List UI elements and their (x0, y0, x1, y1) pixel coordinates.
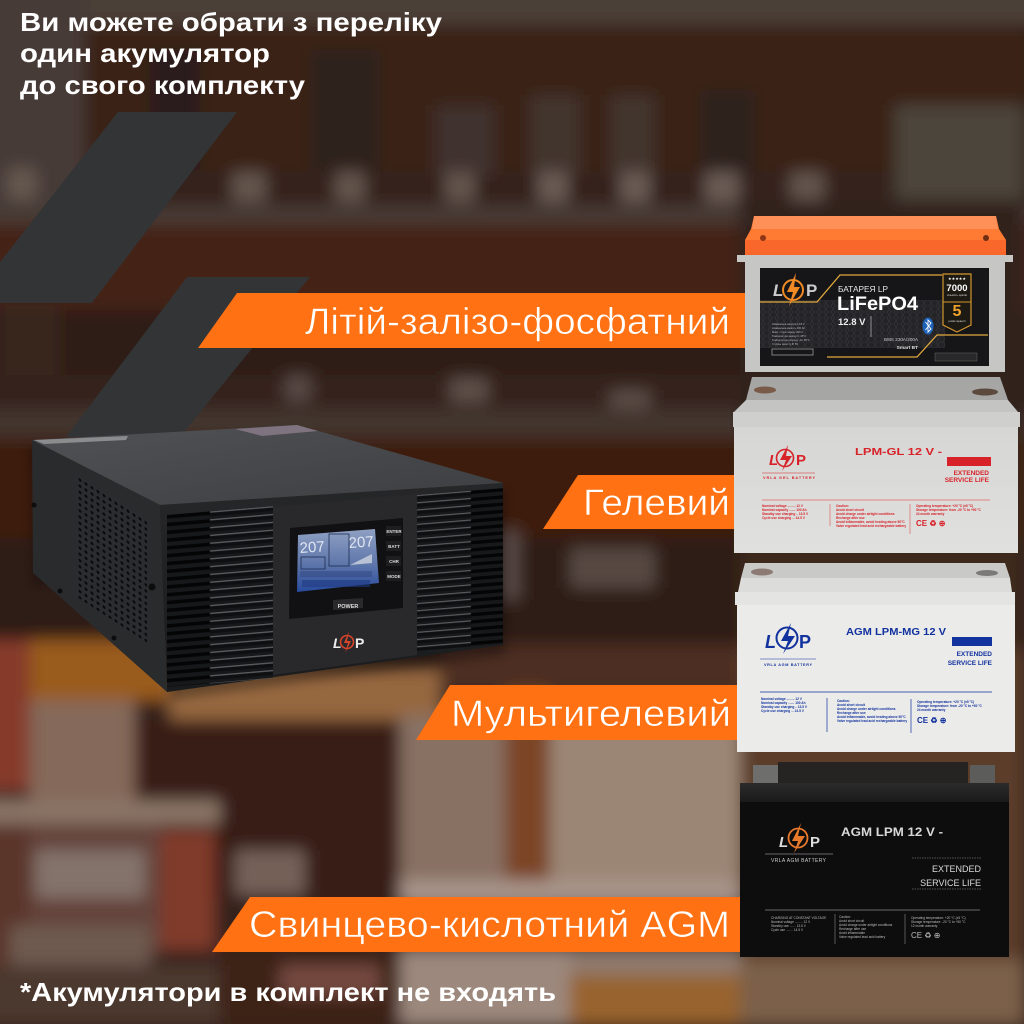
multigel logo (760, 623, 816, 667)
battery grey case (737, 255, 1013, 372)
multigel specs: Cycle use charging ... 14.5 V (761, 709, 805, 713)
multigel specs: Nominal capacity ....... 100 Ah (761, 701, 806, 705)
multigel model text: AGM LPM-MG 12 V (846, 626, 946, 638)
battery: AGM black (740, 762, 1009, 957)
label band: gel (543, 475, 736, 529)
spec lines: Номінальна ємність 230 Ah (772, 326, 805, 330)
inverter lcd screen (297, 529, 379, 592)
battery: LiFePO4: Smart BT (897, 345, 918, 351)
inverter front face (160, 483, 503, 692)
multigel specs: Standby use charging .. 13.5 V (761, 705, 808, 709)
multigel logo: P (799, 632, 811, 652)
multigel specs: Nominal voltage ......... 12 V (761, 697, 803, 701)
warranty badge: 7000 (946, 283, 968, 294)
battery: LiFePO4: 12.8 V (838, 317, 866, 328)
multigel specs: Caution: (837, 699, 850, 703)
multigel logo: VRLA AGM BATTERY (764, 663, 812, 667)
inverter top face (32, 425, 503, 505)
label logo: P (806, 281, 817, 300)
multigel specs: Avoid short circuit (837, 703, 866, 707)
label band: lithium iron phosphate: Літій-залізо-фосфатний (305, 301, 730, 342)
multigel specs (760, 692, 992, 733)
heading text (20, 7, 443, 100)
gel specs (762, 500, 990, 534)
AGM logo: VRLA AGM BATTERY (771, 858, 827, 864)
gel specs: Standby use charging .. 13.5 V (762, 512, 809, 516)
label band: lithium iron phosphate (198, 293, 748, 348)
AGM specs: Avoid inflammable (839, 931, 865, 935)
AGM specs: Standby use ....... 13.5 V (771, 924, 807, 928)
gel specs: Recharge after use (836, 516, 865, 520)
inverter lcd screen: 207 (299, 538, 325, 557)
AGM specs: Avoid charge under airtight conditions (839, 923, 893, 927)
AGM specs: Storage temperature: -20 °C to +50 °C (911, 920, 966, 924)
gel specs: Avoid short circuit (836, 508, 865, 512)
multigel specs: Valve regulated lead acid rechargeable battery (837, 719, 907, 723)
gel specs: Avoid inflammable, avoid heating above 50°C (836, 520, 905, 524)
AGM specs: 12 month warranty (911, 924, 938, 928)
spec lines (772, 322, 810, 346)
inverter buttons (386, 526, 402, 581)
AGM logo: P (810, 834, 820, 851)
spec lines: Макс. струм заряду 200 A (772, 330, 803, 334)
multigel specs: Avoid inflammable, avoid heating above 50°C (837, 715, 906, 719)
warranty badge: 5 (953, 303, 962, 320)
AGM model text: EXTENDED (932, 864, 981, 874)
inverter device (30, 425, 505, 700)
AGM specs: Operating temperature: +20 °C (±5 °C) (911, 916, 966, 920)
label logo (773, 273, 817, 306)
gel specs: Nominal voltage ......... 12 V (762, 504, 804, 508)
battery: LiFePO4 (737, 216, 1013, 372)
gel specs: Storage temperature: from -20 °C to +50 °C (916, 508, 982, 512)
heading text: Ви можете обрати з переліку (20, 7, 443, 37)
battery: multigel (735, 563, 1015, 752)
multigel model text (846, 626, 993, 667)
label band: multigel (416, 685, 738, 740)
battery: gel (733, 377, 1020, 553)
label band: lead acid AGM (212, 897, 742, 952)
multigel specs: CE ♻ ⊕ (917, 716, 947, 725)
inverter buttons: BATT (388, 544, 400, 549)
inverter vents (167, 488, 503, 687)
gel model text: EXTENDED (954, 470, 989, 477)
gel logo (762, 445, 815, 480)
AGM specs: Valve regulated lead acid battery (839, 935, 886, 939)
AGM specs: Recharge after use (839, 927, 866, 931)
AGM specs: CHARGING AT CONSTANT VOLTAGE (771, 916, 826, 920)
inverter centre panel (273, 494, 417, 675)
inverter LOP logo (333, 631, 364, 653)
spec lines: Температура заряду 0..45°C (772, 334, 806, 338)
label band: lead acid AGM: Свинцево-кислотний AGM (249, 904, 730, 945)
gel model text (855, 446, 991, 484)
AGM specs: Caution: (839, 915, 851, 919)
warranty badge: кількість циклів (947, 293, 967, 297)
multigel logo: L (765, 632, 776, 652)
warranty badge: років гарантії (948, 319, 966, 323)
AGM specs: CE ♻ ⊕ (911, 931, 940, 940)
multigel specs: Storage temperature: from -20 °C to +50 °C (917, 704, 983, 708)
gel logo: L (769, 452, 778, 469)
warranty badge: ★★★★★ (948, 276, 966, 281)
battery: LiFePO4: LiFePO4 (837, 294, 918, 315)
gel specs: Avoid charge under airtight conditions (836, 512, 895, 516)
battery lid orange (745, 216, 1006, 255)
multigel specs: 24 month warranty (917, 708, 946, 712)
heading text: один акумулятор (20, 38, 270, 68)
label title: БАТАРЕЯ LP (838, 284, 888, 294)
spec lines: Ступінь захисту IP 65 (772, 342, 798, 346)
inverter power button (333, 598, 363, 610)
AGM model text: AGM LPM 12 V - (841, 825, 943, 839)
label band: multigel: Мультигелевий (451, 693, 731, 734)
battery black label (760, 268, 989, 366)
gel specs: Valve regulated lead acid rechargeable battery (836, 524, 906, 528)
multigel specs: Avoid charge under airtight conditions (837, 707, 896, 711)
inverter lcd screen: 207 (348, 533, 374, 552)
spec lines: Номінальна напруга 12.8 V (772, 322, 805, 326)
gel specs: Cycle use charging ... 14.5 V (762, 516, 806, 520)
AGM specs: Nominal voltage ......... 12 V (771, 920, 811, 924)
label logo: L (773, 281, 783, 300)
AGM specs: Avoid short circuit (839, 919, 864, 923)
multigel model text: EXTENDED (957, 651, 992, 658)
spec lines: Температура розряду -20..60°C (772, 338, 810, 342)
gel model text: LPM-GL 12 V - (855, 446, 943, 458)
inverter left side (32, 440, 167, 692)
decorative dark parallelogram upper (0, 112, 237, 303)
AGM logo (765, 823, 833, 864)
heading text: до свого комплекту (20, 70, 306, 100)
label band: gel: Гелевий (583, 482, 730, 523)
inverter LOP logo: L (333, 635, 342, 651)
warranty badge (943, 274, 971, 332)
inverter display bezel (289, 518, 403, 619)
inverter power button: POWER (338, 604, 358, 610)
decorative dark parallelogram lower (66, 277, 310, 437)
AGM specs (765, 910, 980, 944)
gel model text: SERVICE LIFE (945, 477, 990, 484)
bluetooth icon (922, 318, 934, 334)
AGM logo: L (779, 834, 788, 851)
gel specs: Nominal capacity ....... 100 Ah (762, 508, 807, 512)
gel specs: CE ♻ ⊕ (916, 519, 946, 528)
footnote: *Акумулятори в комплект не входять (20, 977, 556, 1007)
gel specs: 24 month warranty (916, 512, 945, 516)
gel specs: Operating temperature: +20 °C (±5 °C) (916, 504, 973, 508)
AGM model text (841, 825, 981, 889)
inverter buttons: MODE (387, 574, 401, 579)
gel logo: P (796, 452, 806, 469)
inverter buttons: CHR (389, 559, 400, 564)
gel specs: Caution: (836, 504, 849, 508)
gel logo: VRLA GEL BATTERY (763, 476, 815, 480)
multigel specs: Operating temperature: +20 °C (±5 °C) (917, 700, 974, 704)
inverter buttons: ENTER (386, 529, 402, 534)
AGM specs: Cycle use ........ 14.5 V (771, 928, 804, 932)
inverter LOP logo: P (355, 635, 364, 651)
battery: LiFePO4: BMS 230A/200A (884, 337, 919, 342)
multigel specs: Recharge after use (837, 711, 866, 715)
AGM model text: SERVICE LIFE (920, 878, 981, 888)
multigel model text: SERVICE LIFE (948, 660, 993, 667)
